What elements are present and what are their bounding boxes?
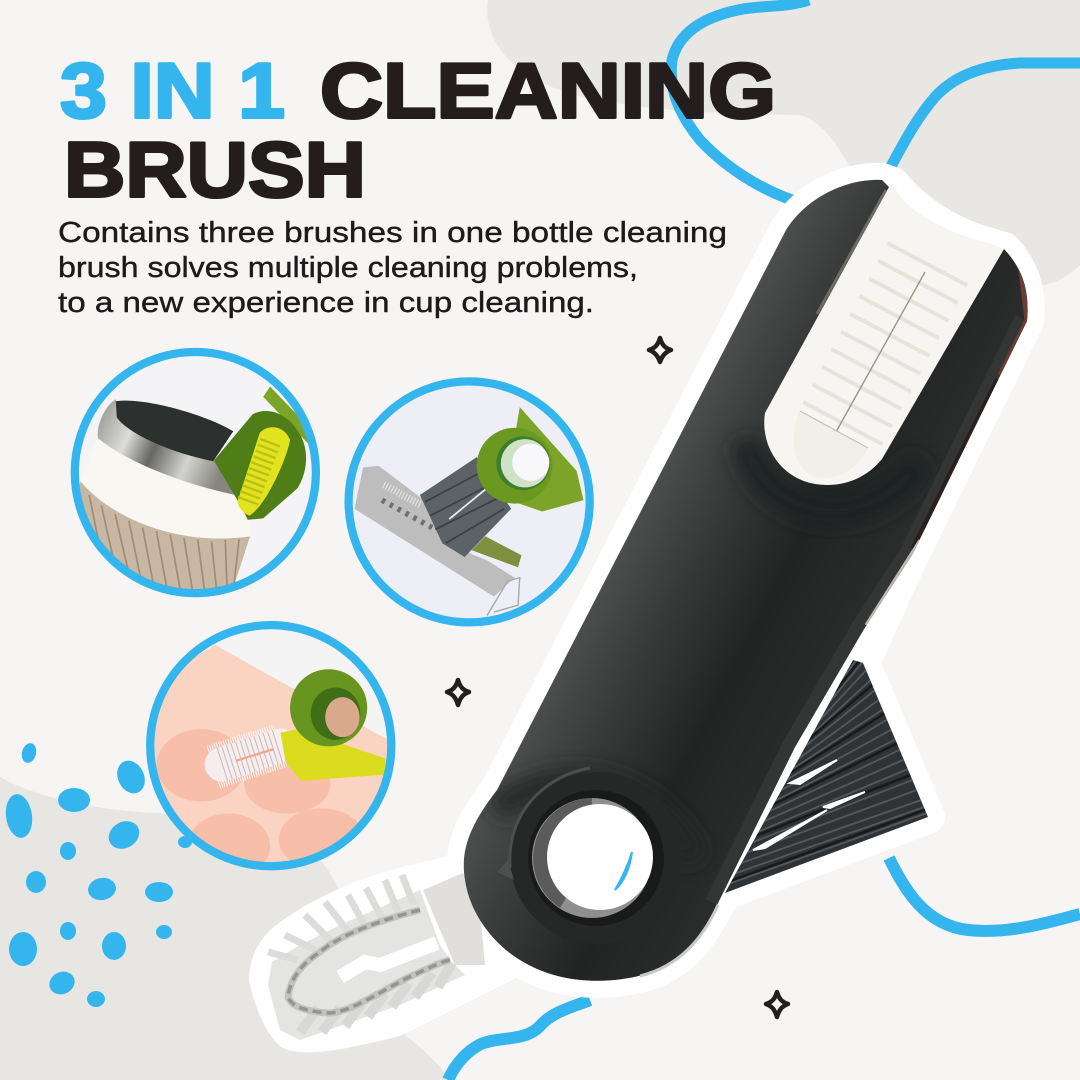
cup steel rim (98, 399, 241, 496)
blue paint drops (3, 742, 192, 1007)
blue curve: bottom right (889, 858, 1080, 931)
spiral wires (288, 910, 450, 1013)
small spiral bristle brush (268, 875, 465, 1040)
tool teeth (382, 500, 435, 529)
circle photo: cup cleaning (70, 352, 316, 602)
cup opening (116, 401, 233, 461)
blue curve: bottom (448, 1000, 590, 1080)
background blob: bottom left (0, 777, 450, 1080)
description text (58, 217, 727, 319)
description text: brush solves multiple cleaning problems, (58, 252, 638, 284)
circle ring (150, 625, 391, 866)
green donut (290, 669, 367, 746)
wire loop (487, 578, 520, 616)
product: 3 in 1 brush (250, 180, 1028, 1051)
bristle mass (268, 890, 465, 1040)
grey bristles (420, 457, 511, 557)
dark handle body (464, 180, 1028, 981)
white centre slit (340, 943, 437, 977)
green brush head (214, 386, 308, 520)
main bristles (720, 652, 930, 893)
white bristle brush (213, 746, 280, 767)
title: CLEANING (320, 46, 776, 134)
white sticker outline (250, 180, 1028, 1051)
sparkle: top (649, 338, 671, 362)
yellow handle (280, 729, 385, 781)
title (60, 46, 776, 214)
twist hole (497, 768, 682, 944)
circle photo: tool cleaning (349, 381, 590, 622)
blue curve: top loop (671, 0, 809, 205)
title: BRUSH (64, 126, 366, 214)
sparkle: bottom (766, 992, 788, 1017)
white rubber scraper head (764, 184, 1004, 485)
bristle spikes (268, 875, 414, 960)
green donut (477, 428, 552, 504)
cup ribbed sleeve (80, 482, 250, 589)
circle ring (75, 352, 316, 593)
green handle (516, 407, 584, 512)
description text: to a new experience in cup cleaning. (58, 287, 594, 319)
blue curve: top right (889, 63, 1080, 170)
green plate (472, 536, 521, 567)
grey stem (423, 873, 485, 965)
cup white band (81, 482, 250, 538)
circle ring (349, 381, 590, 622)
circle photo: ice tray cleaning (146, 625, 401, 879)
pink tray (154, 644, 388, 862)
silver lower edge (640, 905, 718, 976)
sparkle: middle (447, 680, 469, 705)
silver tool (354, 466, 515, 597)
title: 3 IN 1 (60, 46, 285, 134)
tray cups (156, 729, 358, 862)
background blob: top right (487, 0, 1080, 288)
description text: Contains three brushes in one bottle cleaning (58, 217, 727, 249)
